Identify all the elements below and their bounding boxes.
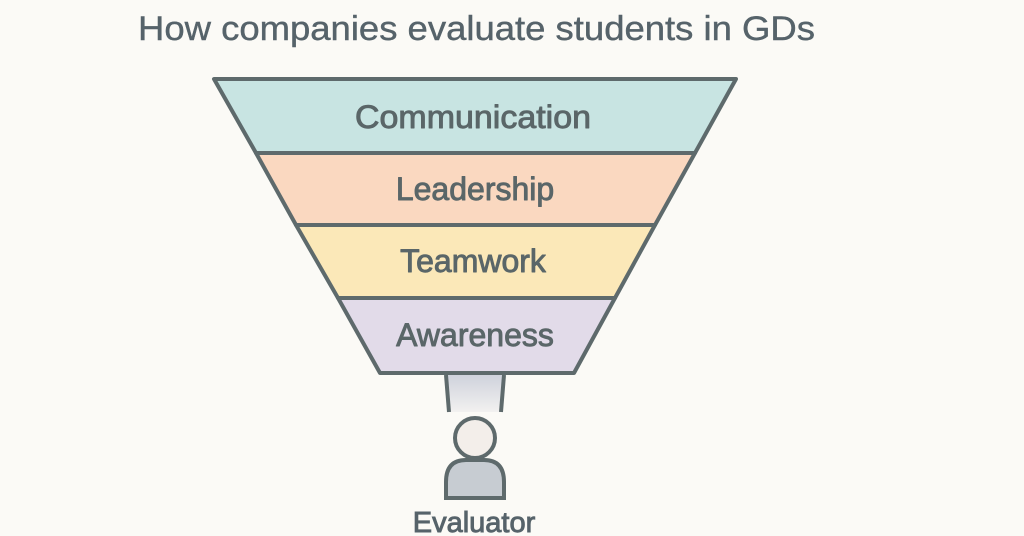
band: leadership <box>256 153 695 225</box>
band: awareness: Awareness <box>396 317 554 353</box>
band: teamwork <box>296 225 655 298</box>
funnel stem <box>446 375 504 412</box>
band: teamwork: Teamwork <box>400 243 547 279</box>
band: awareness <box>338 298 615 373</box>
band: communication <box>214 79 736 153</box>
funnel <box>214 79 736 373</box>
band: leadership: Leadership <box>396 171 554 207</box>
band: communication: Communication <box>355 99 591 135</box>
icon: evaluator person <box>446 418 504 498</box>
title: How companies evaluate students in GDs <box>138 10 815 48</box>
